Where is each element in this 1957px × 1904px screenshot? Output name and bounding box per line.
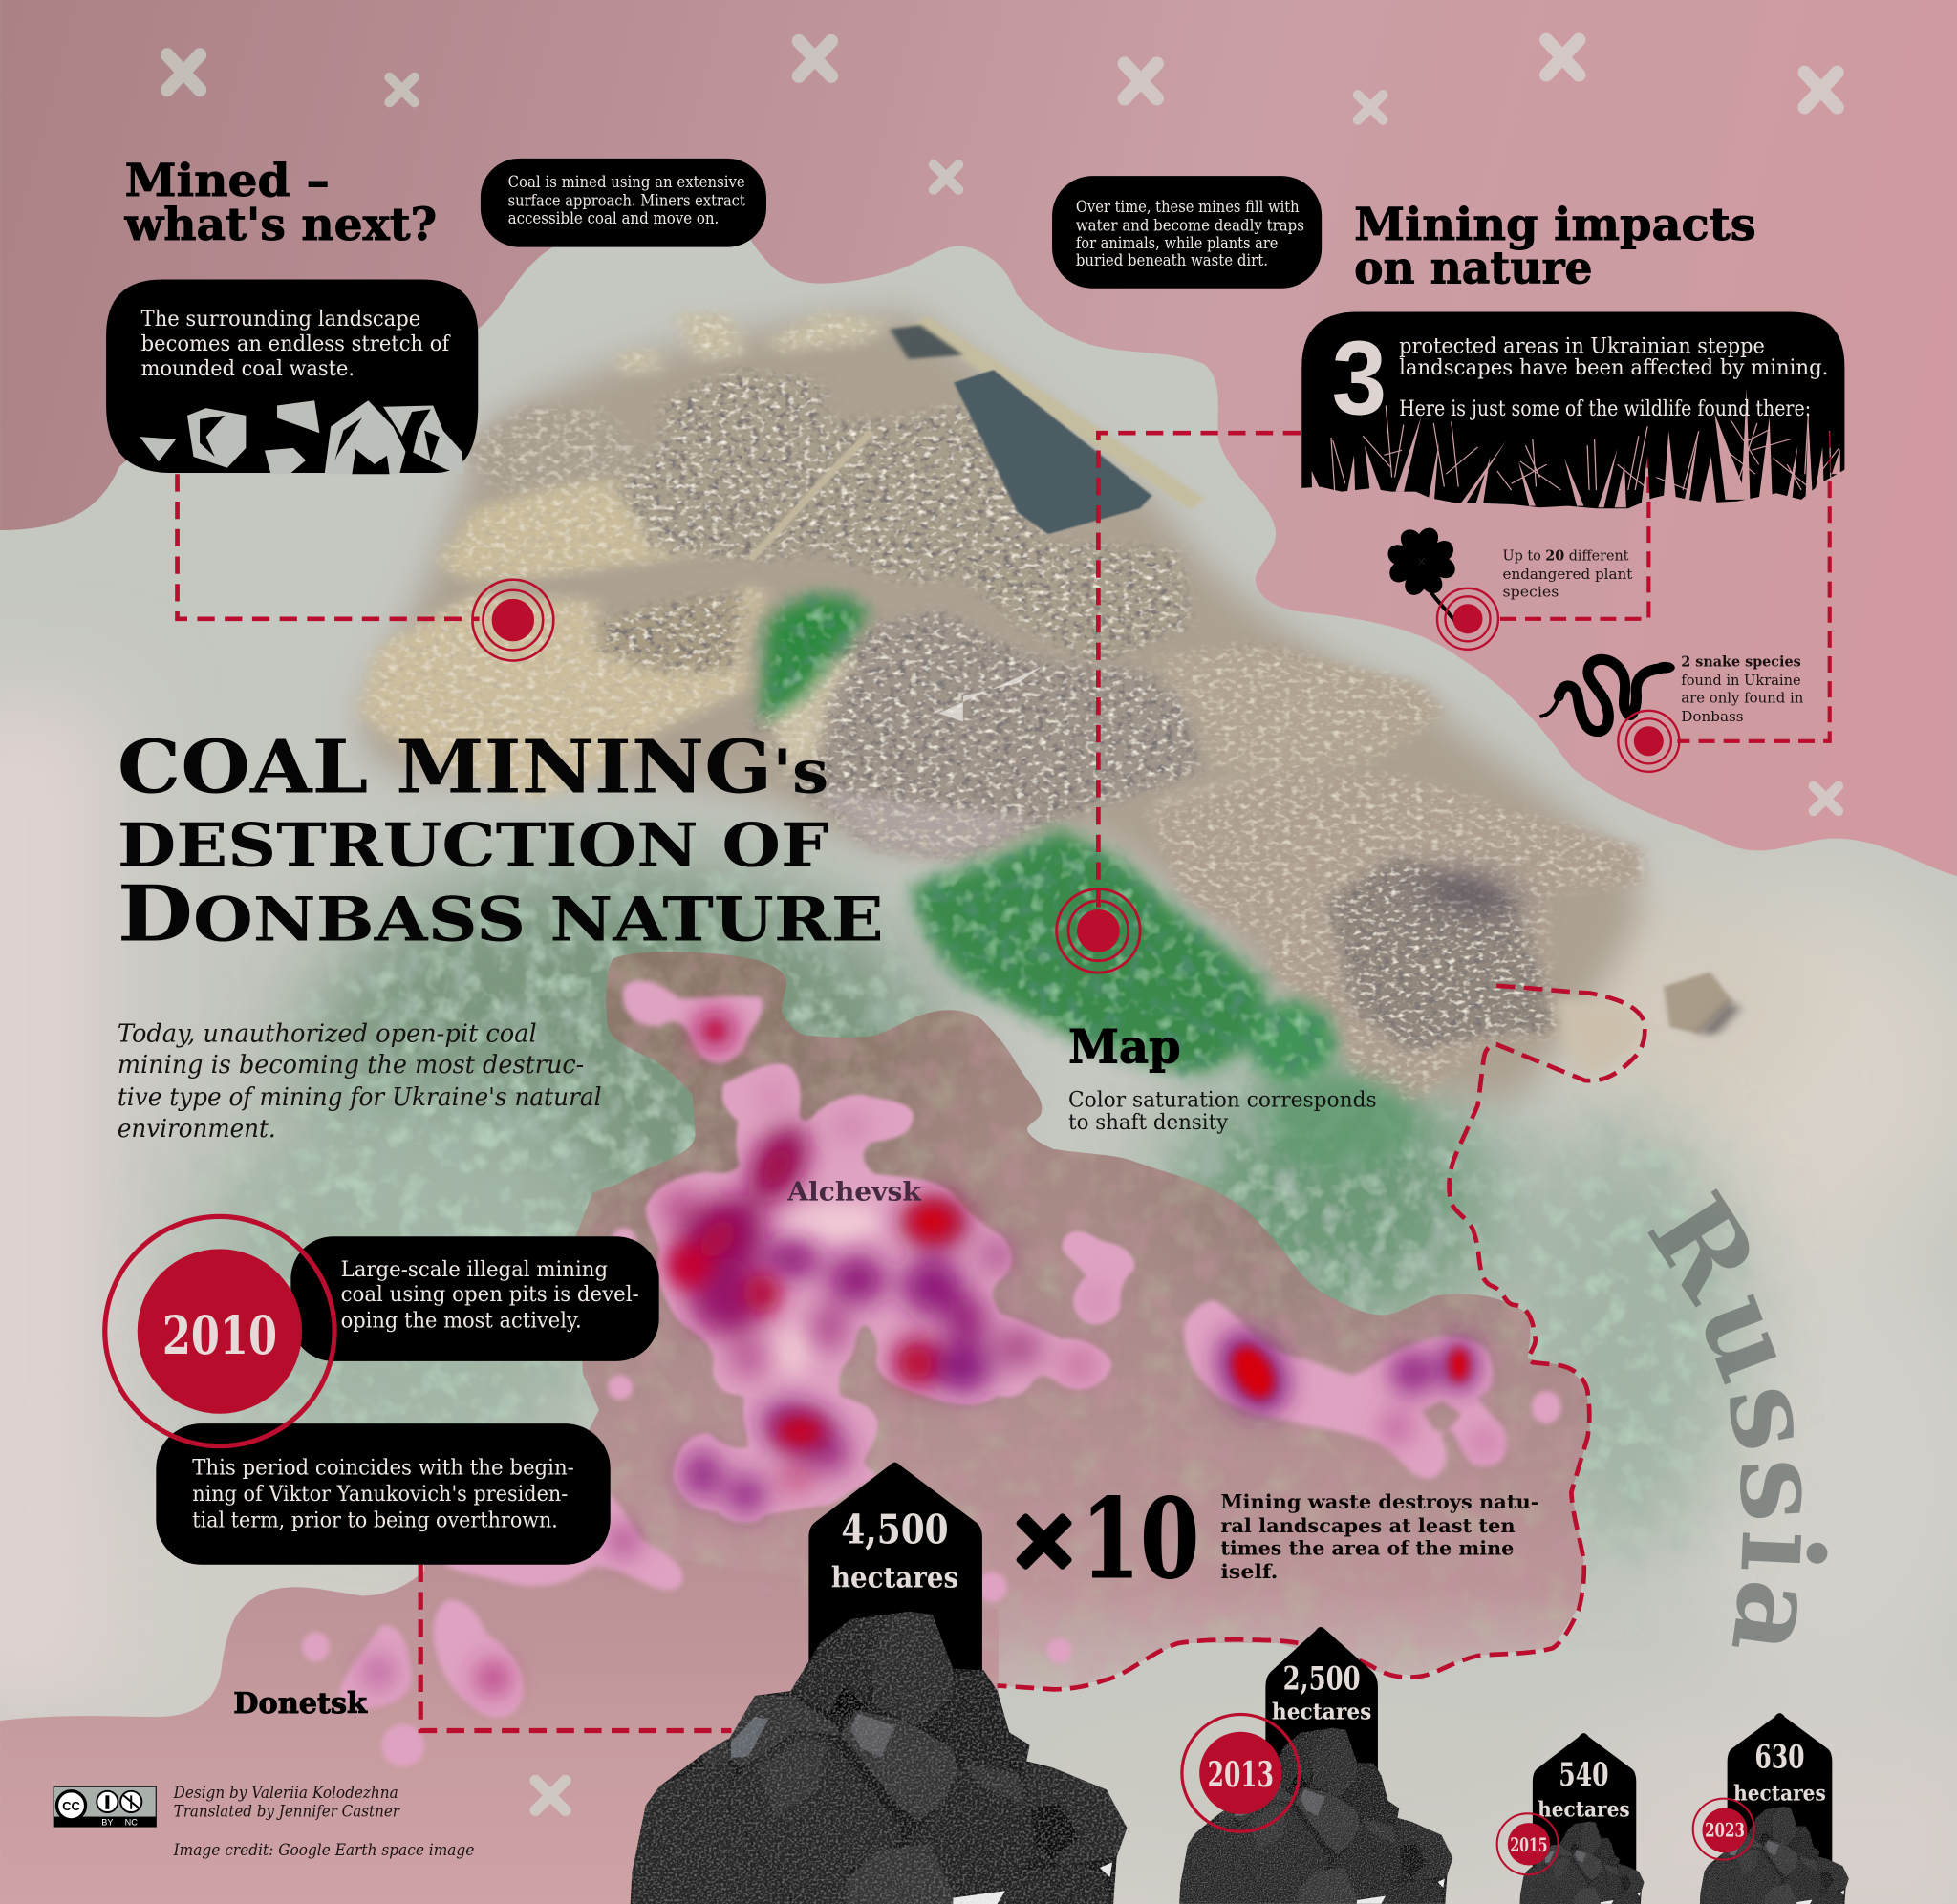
coal pile: 630 hectares [1700, 1713, 1849, 1904]
panel: 3 protected areas with grass [1301, 312, 1844, 514]
text box: coal is mined [481, 159, 766, 247]
text box: Yanukovich term: ning of Viktor Yanukovich's presiden- [192, 1482, 568, 1507]
icon: creative commons badge: BY [101, 1818, 113, 1828]
mounds left and top [359, 312, 1309, 955]
dashed connector: snake [1677, 432, 1830, 741]
text: mining waste: Mining waste destroys natu- [1220, 1489, 1538, 1513]
text box: surrounding landscape with rocks: mounded coal waste. [141, 356, 355, 381]
text: protected areas: landscapes have been affected by mining. [1399, 355, 1828, 380]
text box: mines fill with water: water and become deadly traps [1076, 217, 1304, 235]
intro text [118, 1020, 602, 1144]
map heading and legend: to shaft density [1068, 1110, 1229, 1135]
credits [173, 1784, 474, 1859]
title [118, 724, 884, 960]
text: plant species [1503, 546, 1632, 600]
text box: large-scale illegal mining [290, 1236, 659, 1361]
title: DONBASS NATURE [118, 869, 884, 960]
year marker: 2013: 2013 [1208, 1754, 1274, 1795]
spoil heap underlay [363, 312, 1642, 1101]
city label: Alchevsk: Alchevsk [786, 1176, 922, 1207]
icon: clover [1387, 527, 1456, 621]
forest [762, 596, 1334, 1081]
year marker: 2013 [1182, 1714, 1300, 1831]
year marker: 2010 [105, 1216, 334, 1446]
text box: large-scale illegal mining: coal using open pits is devel- [341, 1282, 639, 1307]
text: mining waste: ral landscapes at least ten [1220, 1513, 1516, 1537]
text box: coal is mined: accessible coal and move on. [508, 209, 719, 227]
panel: lower left pink region [0, 1547, 999, 1904]
stat: times ten: × [1008, 1489, 1080, 1589]
text: snake species [1681, 652, 1804, 725]
credits: Design by Valeriia Kolodezhna [173, 1784, 398, 1802]
text: snake species: found in Ukraine [1681, 672, 1801, 689]
text box: surrounding landscape with rocks: The surrounding landscape [141, 307, 420, 332]
intro text: tive type of mining for Ukraine's natural [118, 1083, 602, 1112]
mounds right [1150, 647, 1739, 1103]
coal pile: 540 hectares [1520, 1733, 1644, 1904]
heading: Mining impacts on nature: Mining impacts [1354, 199, 1756, 251]
text: plant species: Up to 20 different [1503, 546, 1628, 564]
text box: coal is mined: Coal is mined using an extensive [508, 173, 745, 191]
text box: Yanukovich term: tial term, prior to being overthrown. [192, 1508, 558, 1533]
coal pile: 630 hectares: 630 [1754, 1739, 1805, 1777]
map label: Russia: Russia [1647, 1188, 1827, 1647]
year marker: 2023 [1693, 1799, 1754, 1860]
text: protected areas: protected areas in Ukrainian steppe [1399, 334, 1765, 359]
coal pile: 630 hectares: hectares [1733, 1782, 1826, 1807]
stat: times ten [1008, 1475, 1199, 1604]
heading: Mined – what's next?: Mined – [125, 155, 330, 207]
stat: times ten: 10 [1081, 1475, 1199, 1604]
intro text: mining is becoming the most destruc- [118, 1051, 584, 1080]
city label: Donetsk: Donetsk [233, 1687, 368, 1721]
coal pile: large with 4,500 hectares: hectares [831, 1561, 958, 1594]
icon: creative commons badge: NC [125, 1818, 138, 1828]
coal pile: 2,500 hectares: hectares [1272, 1699, 1371, 1725]
text: mining waste: times the area of the mine [1220, 1535, 1514, 1559]
heading: Mining impacts on nature [1354, 199, 1756, 294]
number: 3: 3 [1332, 321, 1387, 438]
text: snake species: Donbass [1681, 708, 1744, 725]
dashed connector: Yanukovich box to coal pile [420, 1565, 731, 1730]
text box: mines fill with water: Over time, these mines fill with [1076, 198, 1300, 216]
dashed connector: plant [1495, 452, 1648, 619]
smaller heat patches [302, 980, 1561, 1766]
text: plant species: endangered plant [1503, 566, 1632, 583]
decorative x marks [167, 40, 1839, 1810]
text box: mines fill with water: buried beneath waste dirt. [1076, 251, 1268, 269]
map heading and legend [1068, 1021, 1377, 1135]
coal pile: large with 4,500 hectares [631, 1463, 1127, 1904]
text box: surrounding landscape with rocks [106, 280, 478, 474]
text: mining waste: iself. [1220, 1559, 1278, 1583]
text: plant species: species [1503, 583, 1559, 600]
text: snake species: are only found in [1681, 689, 1804, 706]
text: protected areas: Here is just some of the wildlife found there: [1399, 396, 1811, 421]
icon: creative commons badge: CC [62, 1799, 81, 1813]
muted vegetation [200, 861, 1734, 1547]
credits: Translated by Jennifer Castner [174, 1803, 400, 1821]
year marker: 2010: 2010 [162, 1304, 277, 1366]
text box: coal is mined: surface approach. Miners extract [508, 191, 745, 209]
text box: large-scale illegal mining: oping the most actively. [341, 1309, 582, 1334]
target marker on mound [472, 580, 553, 661]
year marker: 2015: 2015 [1510, 1834, 1548, 1856]
coal pile: large with 4,500 hectares: 4,500 [841, 1507, 949, 1553]
text box: surrounding landscape with rocks: becomes an endless stretch of [141, 332, 451, 356]
heading: Mining impacts on nature: on nature [1354, 242, 1593, 294]
dashed connector: mound to landscape box [178, 474, 480, 619]
text: mining waste [1220, 1489, 1538, 1583]
text box: large-scale illegal mining: Large-scale illegal mining [341, 1257, 608, 1282]
coal pile: 540 hectares: hectares [1538, 1798, 1630, 1823]
text: snake species: 2 snake species [1681, 652, 1801, 670]
black panel cut by grass silhouette [1301, 312, 1844, 514]
coal pile: 540 hectares: 540 [1559, 1756, 1609, 1794]
title: DESTRUCTION OF [118, 809, 828, 880]
intro text: Today, unauthorized open-pit coal [118, 1020, 537, 1049]
dashed connector: protected areas to green target [1098, 433, 1301, 926]
snake target marker [1618, 711, 1679, 772]
map heading and legend: Color saturation corresponds [1068, 1087, 1377, 1112]
icon: snake [1541, 659, 1675, 732]
icon: coal rocks [140, 400, 464, 474]
icon: creative commons badge [54, 1786, 156, 1828]
year marker: 2015 [1497, 1813, 1559, 1874]
coal pile: 2,500 hectares: 2,500 [1283, 1659, 1361, 1698]
text box: Yanukovich term [156, 1423, 611, 1565]
title: COAL MINING 's [118, 724, 828, 810]
text box: Yanukovich term: This period coincides with the begin- [192, 1456, 574, 1481]
map heading and legend: Map [1068, 1021, 1181, 1075]
target marker on forest [1057, 889, 1140, 973]
heading: Mined – what's next? [124, 155, 437, 251]
plant target marker [1437, 588, 1498, 650]
year marker: 2023: 2023 [1705, 1819, 1745, 1841]
credits: Image credit: Google Earth space image [173, 1841, 474, 1859]
panel: map region [424, 952, 1590, 1746]
heading: Mined – what's next?: what's next? [124, 199, 437, 251]
text: protected areas [1399, 334, 1828, 421]
panel: pink sky region with curved edge [0, 0, 1957, 876]
border of Ukraine/Russia: dashed line [998, 986, 1645, 1689]
coal pile: 2,500 hectares [1179, 1627, 1452, 1904]
intro text: environment. [118, 1115, 276, 1144]
text box: mines fill with water: for animals, while plants are [1076, 234, 1278, 252]
map heat: mine shaft density [302, 980, 1561, 1766]
text box: mines fill with water [1052, 176, 1322, 289]
